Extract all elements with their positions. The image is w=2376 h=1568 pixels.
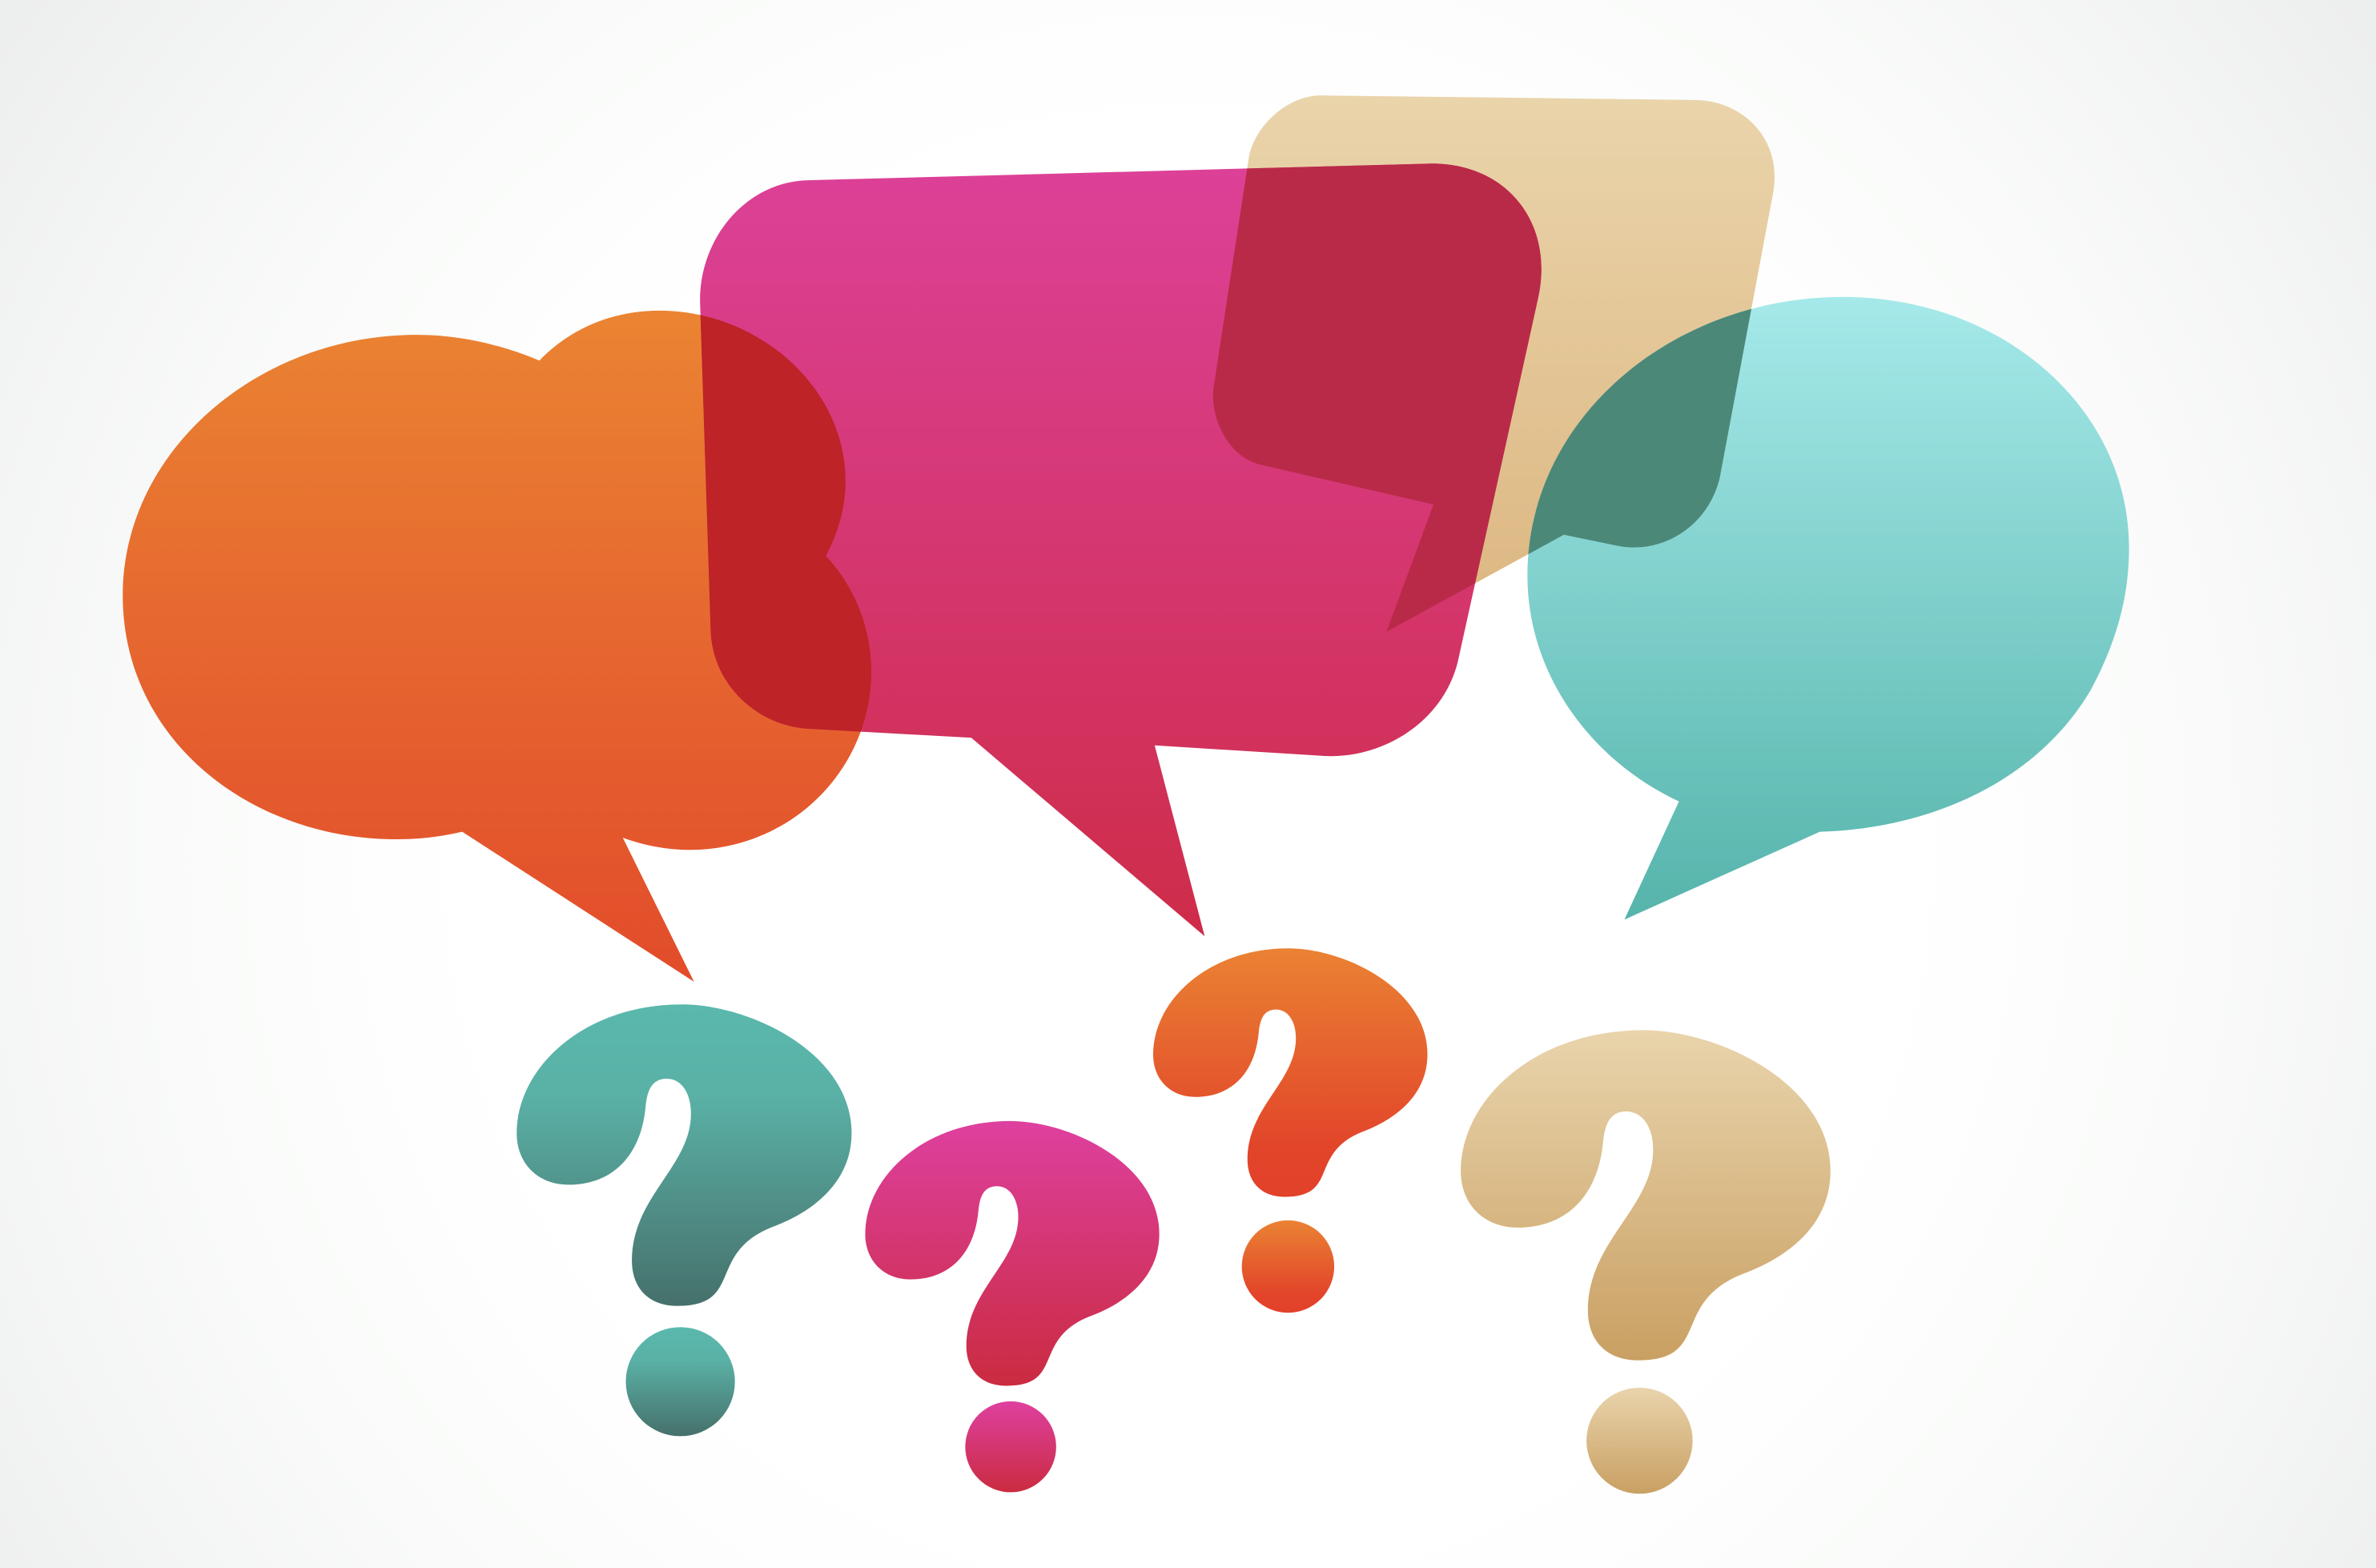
speech bubble: orange <box>123 311 871 982</box>
overlap: tan and pink bubbles <box>1212 163 1542 632</box>
speech bubble: tan <box>1213 95 1775 632</box>
question mark: orange <box>1153 948 1427 1313</box>
overlap: orange and pink bubbles <box>700 315 871 732</box>
overlap: tan and teal bubbles <box>1528 309 1751 554</box>
question mark: teal <box>517 1004 851 1436</box>
question mark: pink <box>865 1121 1160 1492</box>
speech bubble: teal <box>1527 297 2129 919</box>
speech bubble: pink <box>700 163 1542 936</box>
question mark: tan <box>1461 1030 1831 1494</box>
